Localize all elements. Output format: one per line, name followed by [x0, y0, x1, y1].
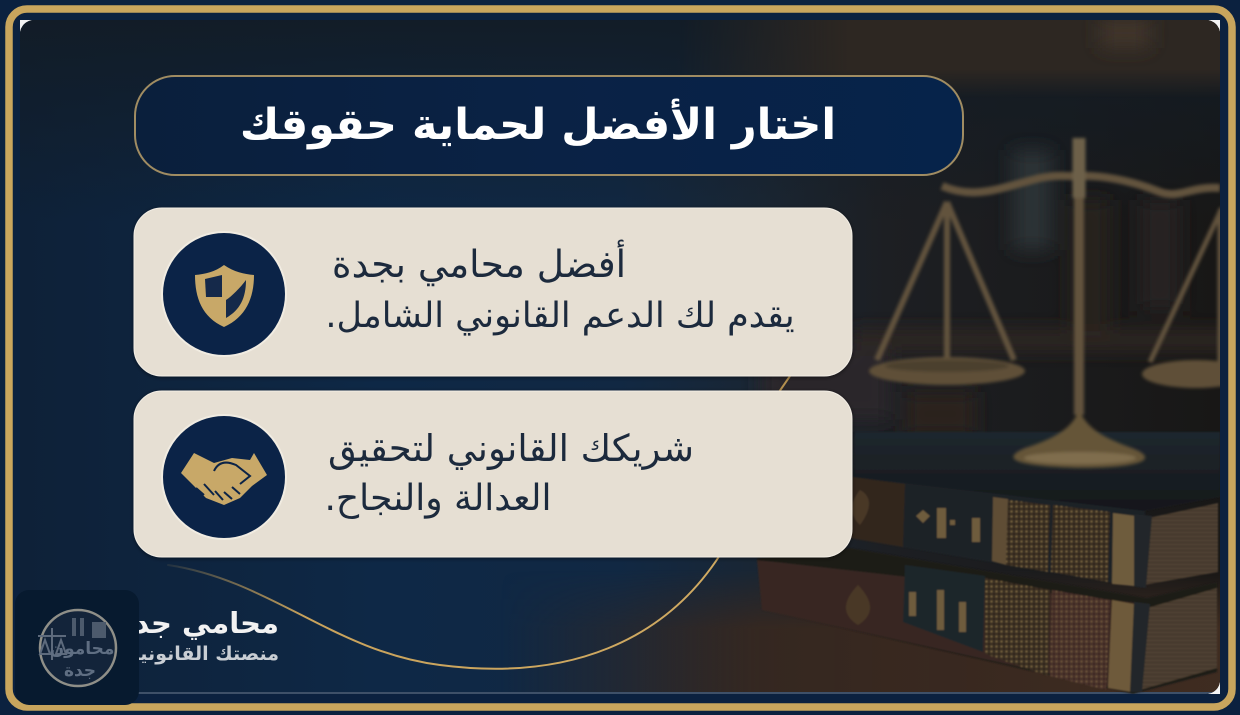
- footer brand text: [139, 611, 278, 664]
- decorative gold curve: [168, 376, 790, 669]
- footer brand text: محامي جدة: [117, 606, 279, 640]
- icon: round law firm seal: جدة: [64, 661, 96, 681]
- title text: اختار الأفضل لحماية حقوقك: [240, 98, 836, 150]
- panel: second card: العدالة والنجاح.: [324, 478, 552, 519]
- top book cover: [854, 432, 1220, 496]
- icon: handshake: [162, 415, 286, 539]
- footer brand text: منصتك القانونية: [129, 643, 279, 665]
- bottom book: [757, 548, 1217, 694]
- table surface: [559, 584, 1220, 694]
- spine ornaments: [909, 508, 980, 632]
- icon: blurred scales of justice: [869, 138, 1240, 468]
- panel: first card: يقدم لك الدعم القانوني الشامل.: [325, 296, 795, 336]
- panel: first card: [134, 208, 852, 376]
- first card text: أفضل محامي بجدة: [332, 239, 626, 286]
- second card text: شريكك القانوني لتحقيق: [328, 427, 694, 470]
- top book spine: [904, 484, 1145, 582]
- icon: round law firm seal: [38, 610, 116, 686]
- title banner: [135, 76, 963, 175]
- logo panel: [15, 590, 139, 705]
- icon: stacked law books: [757, 432, 1220, 694]
- panel: second card: [134, 391, 852, 557]
- logo text: محامون: [50, 639, 114, 659]
- icon: shield: [162, 232, 286, 356]
